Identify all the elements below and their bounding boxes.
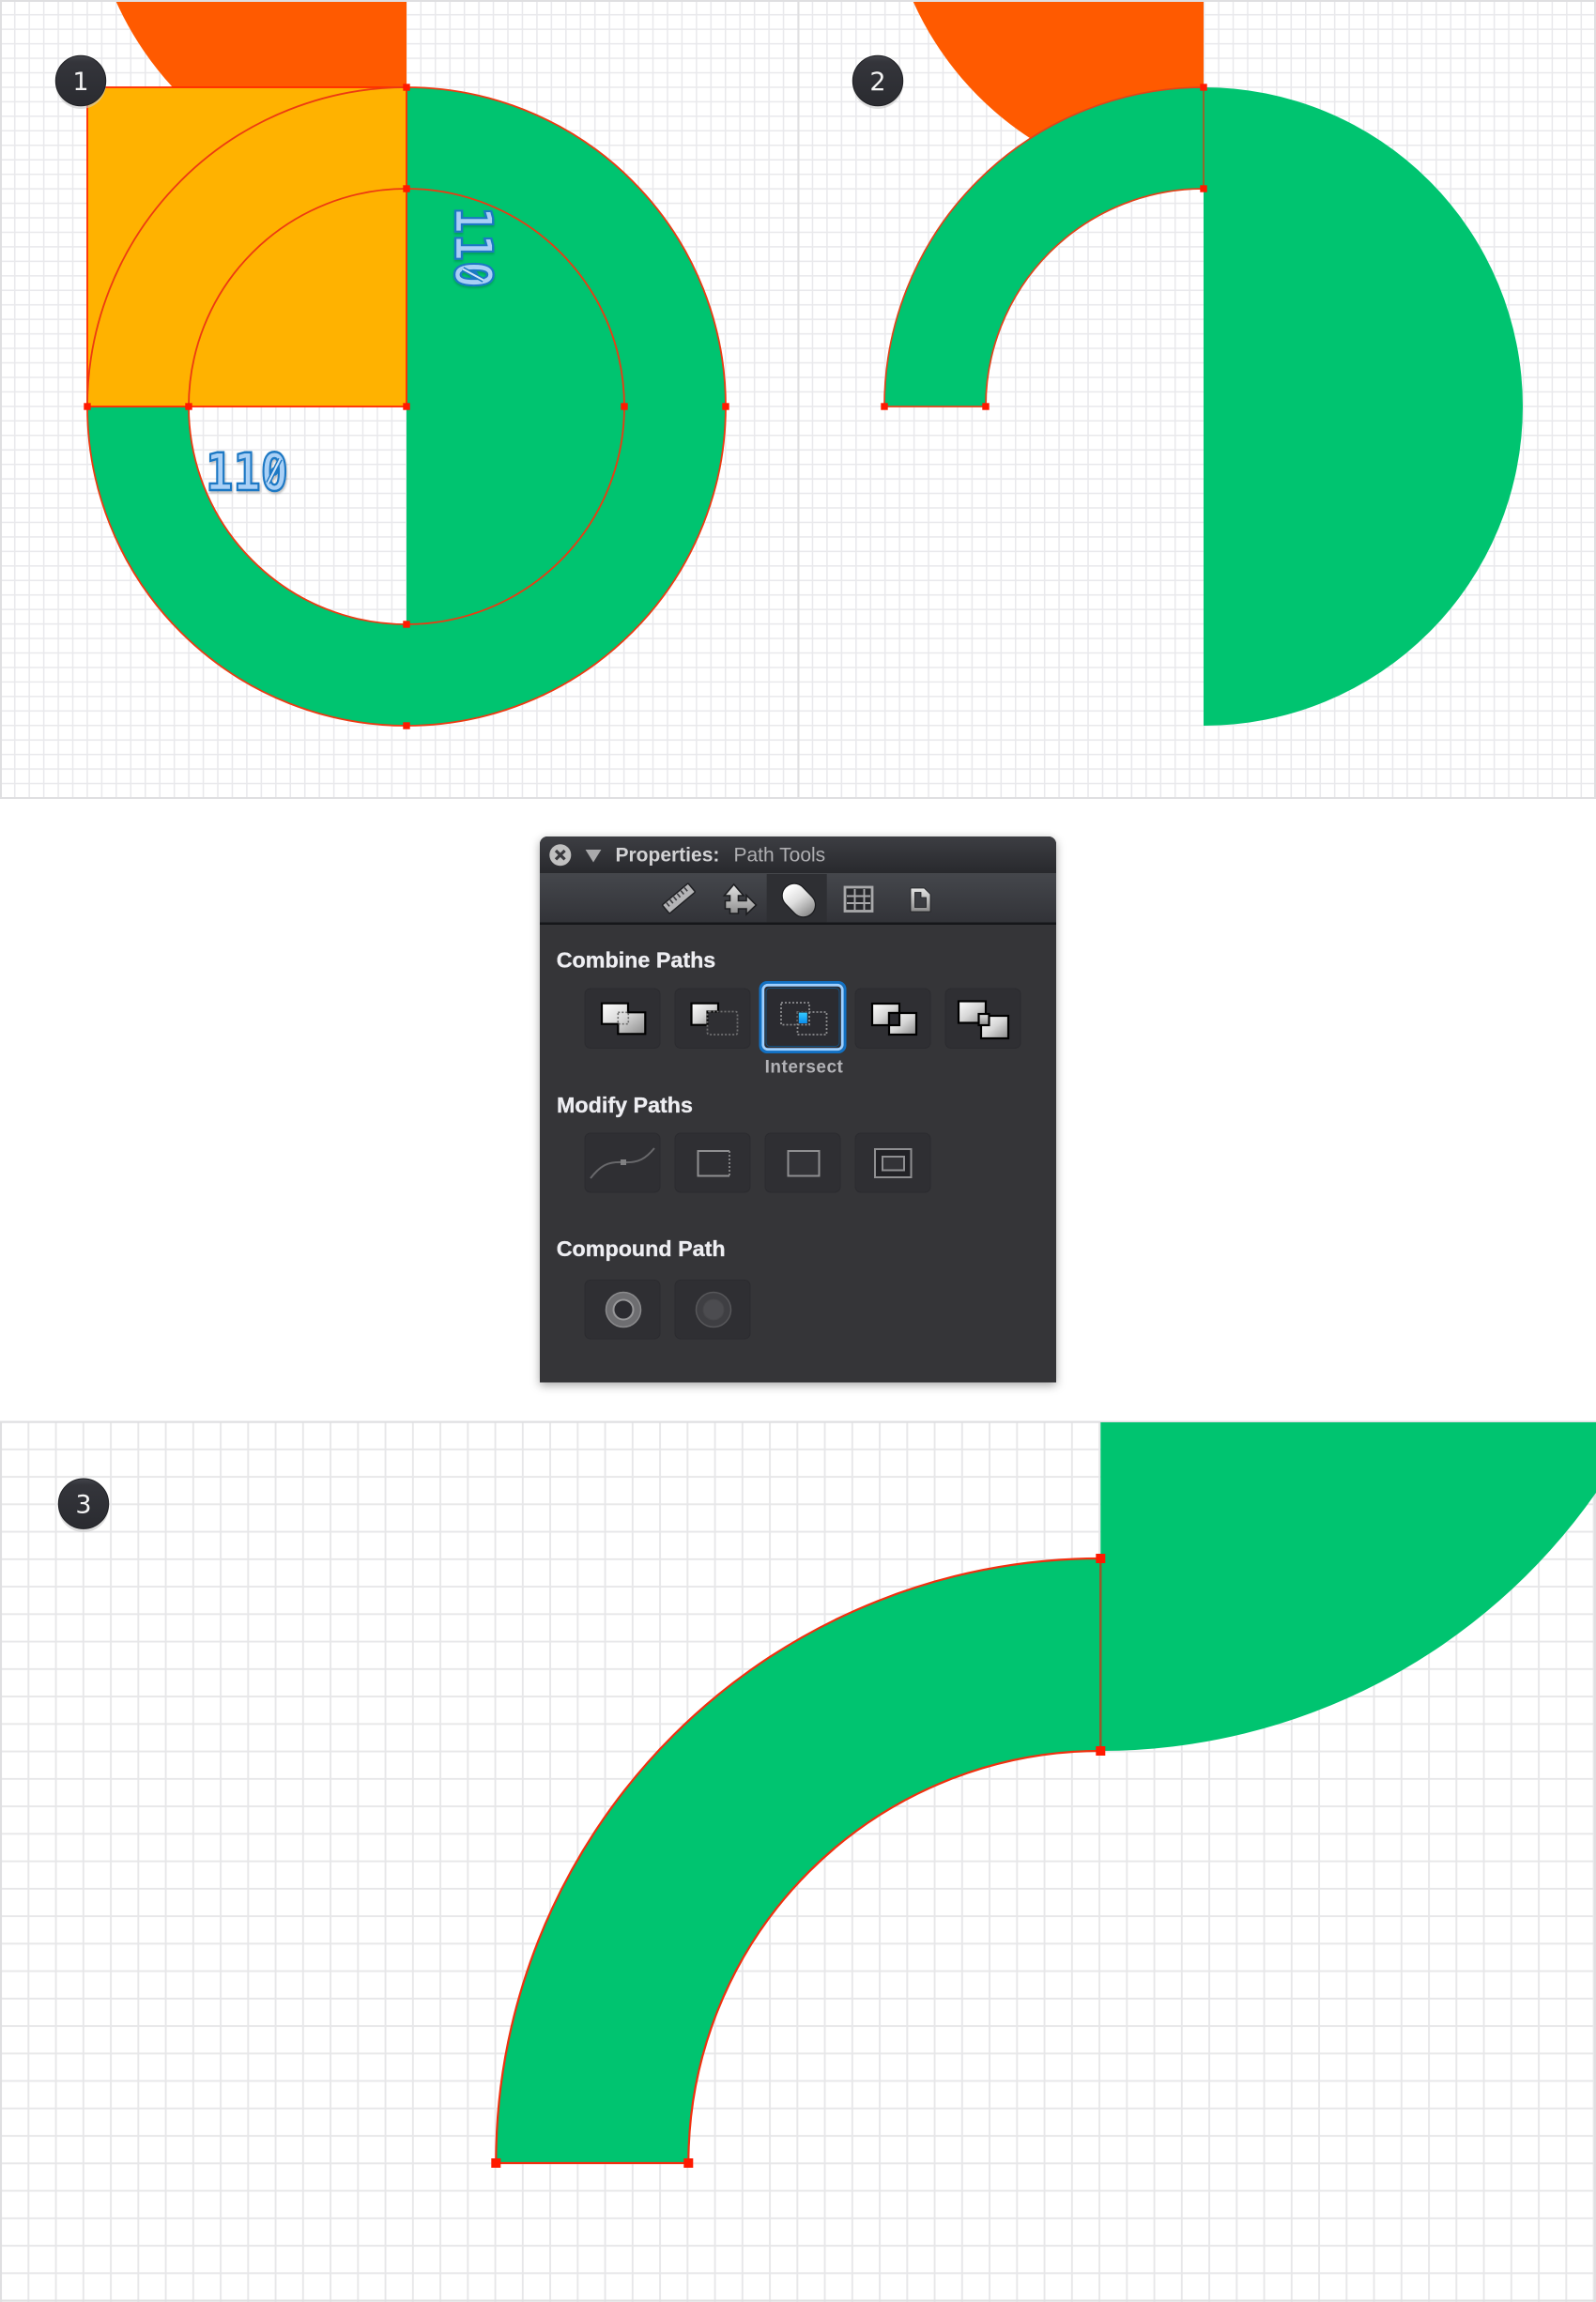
- section: compound path: [557, 1236, 750, 1339]
- green ring and half disc: [87, 87, 726, 726]
- button: make compound: [585, 1281, 660, 1339]
- button: subtract: [675, 989, 750, 1048]
- button: intersect selected: [760, 982, 845, 1051]
- green quarter ring enlarged: [496, 1558, 1100, 2163]
- step badge 2: [852, 55, 903, 109]
- dimension label vertical: 110: [443, 207, 503, 288]
- vertical edge of quarter ring: [1203, 87, 1205, 189]
- button: open path: [675, 1133, 750, 1192]
- icon: overlapping circles: [794, 896, 804, 905]
- button: close path: [765, 1133, 840, 1192]
- anchor points: [881, 84, 1207, 410]
- icon: move arrows: [725, 884, 757, 914]
- section: combine paths: [557, 948, 1021, 1078]
- orange square: [87, 87, 407, 407]
- step badge 3: 3: [75, 1491, 92, 1519]
- anchor points: [491, 1554, 1105, 2168]
- green half disc: [1204, 87, 1523, 726]
- icon: document: [911, 888, 930, 912]
- icon: grid: [845, 887, 872, 911]
- section: modify paths: [557, 1093, 930, 1192]
- green quarter ring: [884, 87, 1204, 407]
- properties panel: path tools: [540, 836, 1056, 1382]
- heading: modify paths: Modify Paths: [557, 1093, 693, 1117]
- toolbar: [540, 873, 1056, 925]
- vertical edge enlarged: [1099, 1558, 1102, 1751]
- step badge 1: [55, 55, 106, 109]
- title bar: Properties:: [616, 845, 719, 867]
- grid background 3: [0, 1421, 1596, 2302]
- orange circle segment: [116, 2, 407, 190]
- orange circle segment: [913, 2, 1204, 190]
- panel: step 2 result: [798, 0, 1596, 799]
- label: intersect: Intersect: [765, 1058, 844, 1078]
- green disc portion: [1100, 1422, 1596, 1751]
- anchor points: [84, 84, 729, 729]
- button: divide: [945, 989, 1021, 1048]
- title bar: Path Tools: [734, 845, 825, 867]
- step badge 2: 2: [869, 68, 886, 97]
- grid background 1: [0, 0, 798, 799]
- panel: step 1 construction: [0, 0, 798, 799]
- dimension label horizontal: 110: [206, 442, 288, 502]
- step badge 1: 1: [72, 68, 89, 97]
- button: simplify: [585, 1133, 660, 1192]
- panel frame bottom: [0, 1421, 1596, 2302]
- panel: step 3 zoomed result: [0, 1421, 1596, 2302]
- icon: ruler: [662, 883, 696, 913]
- title bar: [540, 836, 1056, 873]
- button: release compound: [675, 1281, 750, 1339]
- button: union: [585, 989, 660, 1048]
- button: exclude: [855, 989, 930, 1048]
- button: offset path: [855, 1133, 930, 1192]
- red circle outlines: [87, 87, 726, 726]
- heading: compound path: Compound Path: [557, 1236, 726, 1261]
- grid background 2: [798, 0, 1596, 799]
- step badge 3: [58, 1479, 109, 1532]
- heading: combine paths: Combine Paths: [557, 948, 715, 973]
- panel frame top: [0, 0, 1596, 799]
- panel body: [540, 836, 1056, 1382]
